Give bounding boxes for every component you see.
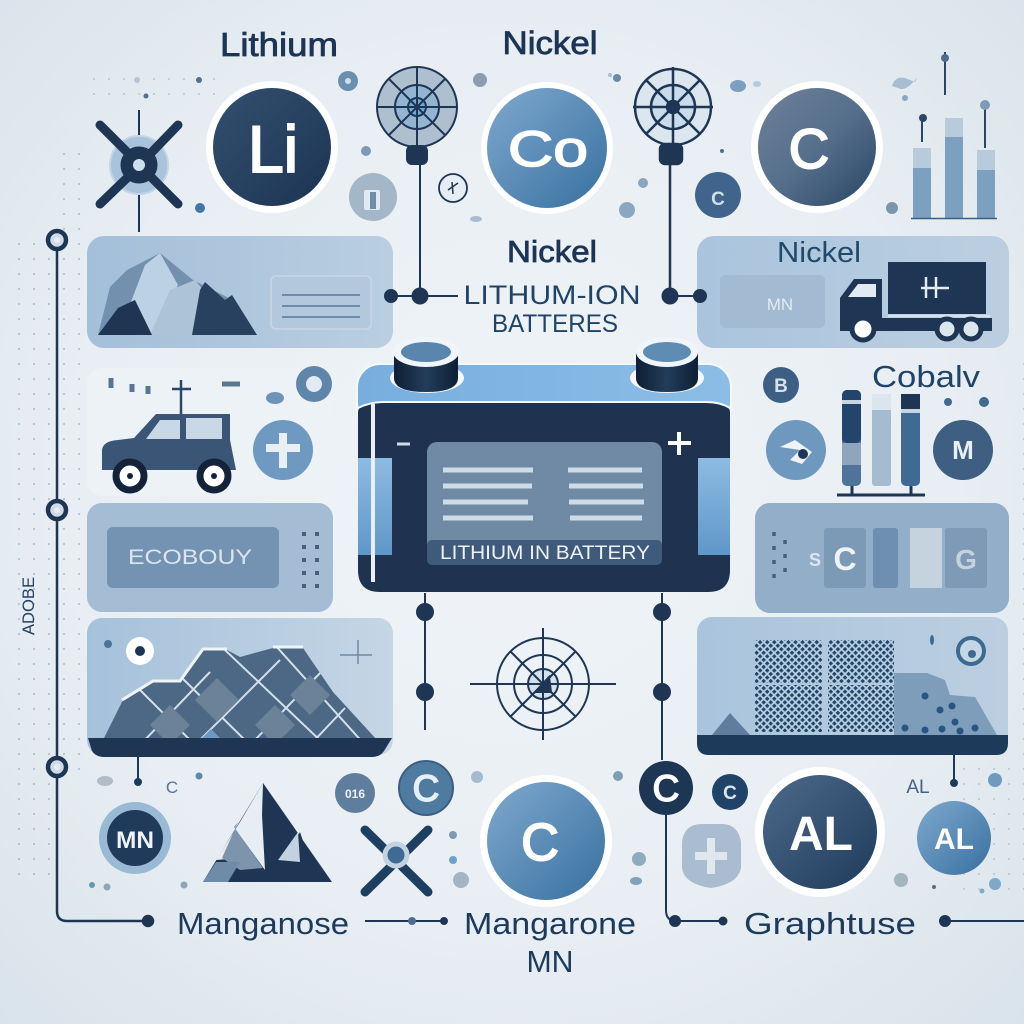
panel: rocks top left bbox=[87, 236, 393, 348]
panel: C G tiles: S bbox=[809, 550, 821, 570]
battery terminals bbox=[390, 337, 704, 393]
panel: graphite mesh right bbox=[697, 617, 1008, 755]
icon: central network target bbox=[470, 628, 616, 740]
panel: C G tiles bbox=[755, 503, 1009, 613]
label: C and AL loose bbox=[97, 755, 958, 813]
element badge: C small top: C bbox=[711, 189, 725, 210]
small badges top bbox=[134, 71, 916, 222]
panel: Ecobody bbox=[87, 503, 333, 612]
panel: Ecobody: ECOBOUY bbox=[128, 546, 252, 569]
element badge: C small top bbox=[695, 172, 741, 218]
heading: Lithium-ion batteries bbox=[464, 280, 640, 338]
heading: Cobalt right: Cobalv bbox=[872, 359, 981, 394]
heading: Mangarone MN: Mangarone bbox=[464, 906, 636, 941]
element circle: C large bbox=[480, 775, 612, 907]
connectors to battery bbox=[385, 288, 706, 760]
bottom connectors bbox=[365, 815, 1024, 926]
icon: network globe right bbox=[633, 67, 713, 296]
panel: C G tiles: C bbox=[833, 541, 857, 577]
icon: mountain bbox=[203, 783, 332, 882]
panel: truck top right bbox=[697, 236, 1009, 348]
car icon bbox=[87, 366, 332, 496]
heading: Graphtuse: Graphtuse bbox=[744, 906, 916, 941]
icon: shield plus bbox=[682, 824, 741, 888]
heading: Lithium-ion batteries: BATTERES bbox=[492, 310, 618, 338]
icon: network globe left bbox=[377, 67, 457, 296]
panel: mineral pile left bbox=[87, 618, 393, 757]
badges and cylinders right: B bbox=[774, 376, 788, 397]
heading: Lithium: Lithium bbox=[220, 26, 338, 63]
heading: Mangarone MN bbox=[464, 906, 636, 979]
battery side windows bbox=[358, 404, 730, 582]
heading: Manganose: Manganose bbox=[177, 906, 349, 941]
heading: Nickel centre: Nickel bbox=[507, 234, 597, 269]
plus badge bbox=[253, 420, 313, 480]
icon: crossed tools left bbox=[100, 110, 178, 232]
element circle: C small left bbox=[399, 761, 453, 815]
element circle: C small right: C bbox=[653, 768, 679, 809]
left timeline bbox=[48, 231, 153, 926]
element circle: Al small bbox=[917, 801, 991, 875]
element circle: Co bbox=[481, 82, 613, 214]
element circle: Li: Li bbox=[248, 112, 298, 186]
element circle: Al large bbox=[755, 767, 885, 897]
vertical side label: ADOBE bbox=[19, 577, 38, 635]
battery bbox=[356, 337, 732, 592]
element circle: C top bbox=[751, 81, 883, 213]
label: C and AL loose: 016 bbox=[345, 787, 365, 801]
element circle: Li bbox=[206, 81, 338, 213]
element circle: Mn bbox=[99, 802, 171, 874]
bar chart icon bbox=[911, 52, 997, 218]
badges and cylinders right: M bbox=[952, 435, 974, 465]
element circle: C top: C bbox=[789, 117, 829, 180]
battery: LITHIUM IN BATTERY bbox=[440, 543, 650, 564]
element circle: C small left: C bbox=[413, 768, 439, 809]
badges and cylinders right bbox=[763, 367, 993, 495]
panel: truck top right: MN bbox=[767, 295, 793, 314]
icon: crossed tools bottom bbox=[365, 830, 428, 892]
label: C and AL loose: AL bbox=[906, 777, 930, 798]
heading: Lithium-ion batteries: LITHUM-ION bbox=[464, 280, 640, 310]
element circle: C small right bbox=[639, 761, 693, 815]
heading: Nickel top: Nickel bbox=[502, 25, 598, 61]
element circle: C large: C bbox=[521, 814, 559, 872]
element circle: Al large: AL bbox=[789, 808, 853, 861]
heading: Mangarone MN: MN bbox=[526, 944, 574, 979]
label: C and AL loose: C bbox=[723, 783, 737, 804]
element circle: Al small: AL bbox=[934, 823, 974, 856]
panel: C G tiles: G bbox=[955, 544, 977, 575]
scattered dots bottom bbox=[89, 771, 1002, 894]
element circle: Mn: MN bbox=[116, 827, 154, 854]
label: C and AL loose: C bbox=[166, 778, 178, 797]
panel: truck top right: Nickel bbox=[777, 237, 861, 269]
element circle: Co: Co bbox=[508, 121, 588, 177]
